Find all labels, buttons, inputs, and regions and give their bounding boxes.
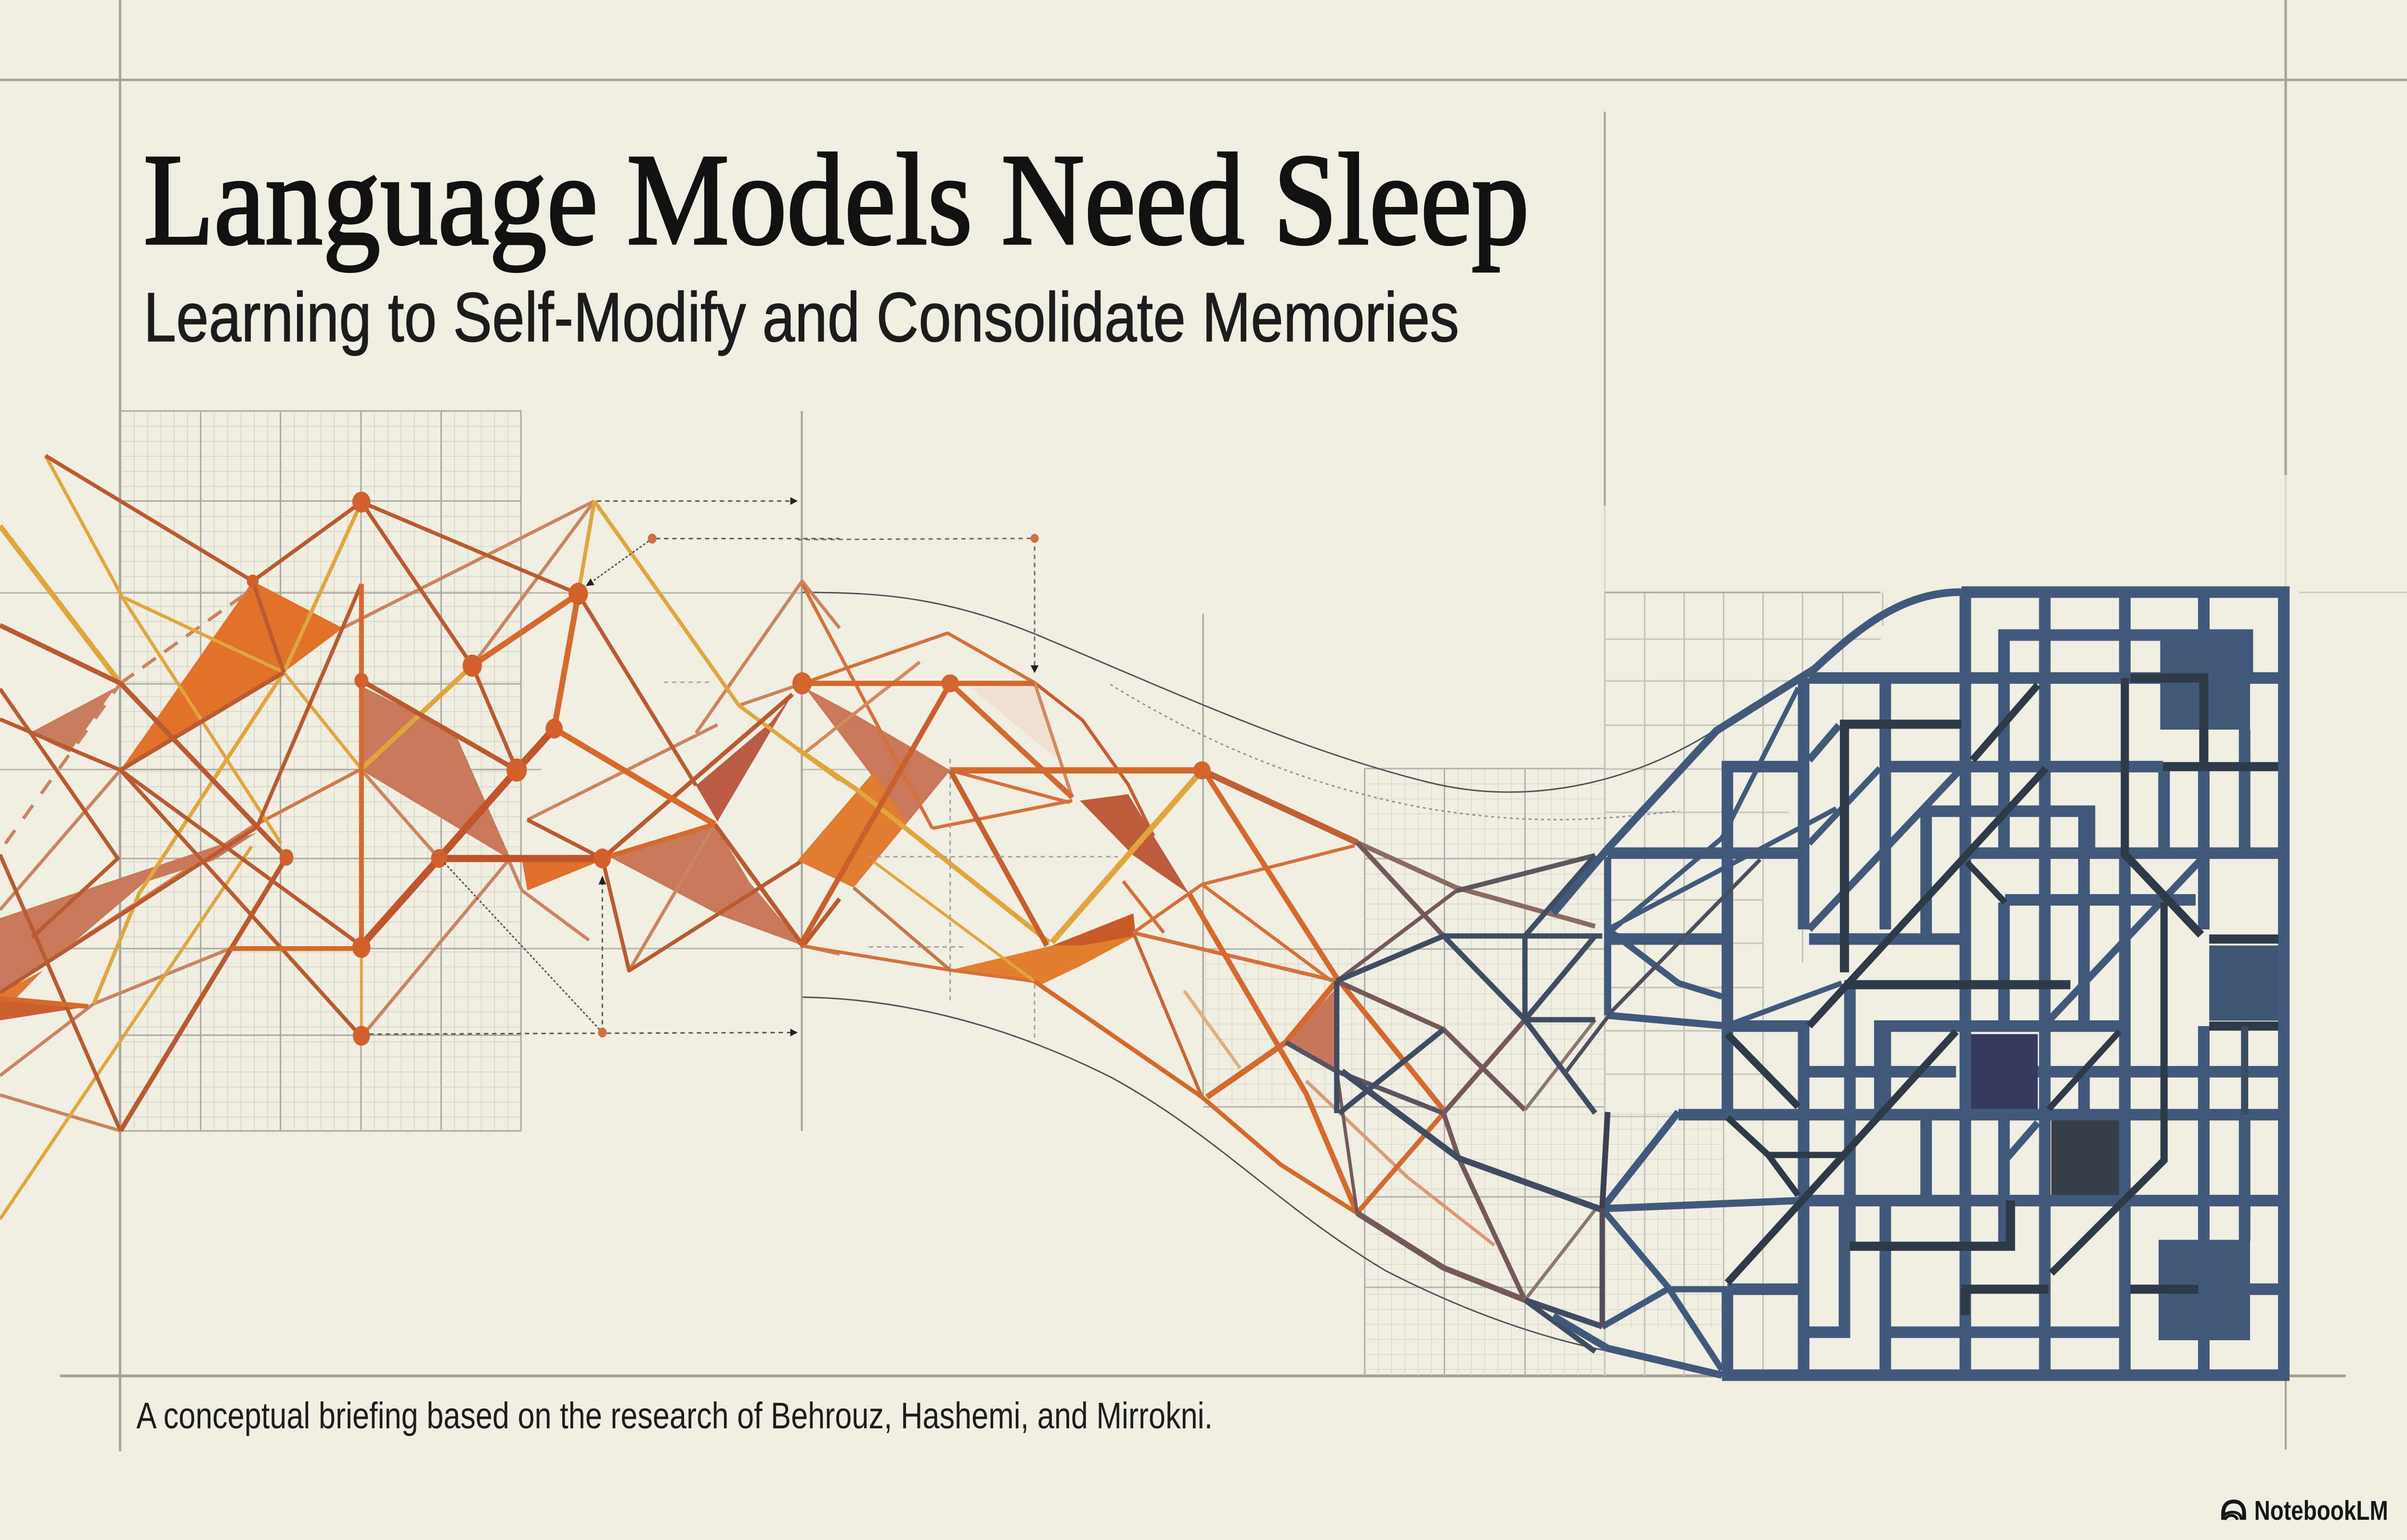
heavy rust links [362, 729, 602, 946]
flow envelope curves [802, 592, 1713, 1355]
subtitle: Learning to Self-Modify and Consolidate Memories [143, 278, 1459, 356]
icon: NotebookLM mark [2223, 1502, 2244, 1520]
navy links [1337, 855, 1602, 1351]
network: left orange section [0, 456, 840, 1219]
title: Language Models Need Sleep [143, 128, 1529, 272]
brown to navy links [1286, 843, 1595, 1300]
thick orange links [800, 683, 1444, 1213]
dashed annotation lines [798, 534, 1118, 1039]
middle graph paper [1203, 769, 1722, 1376]
filled memory blocks [1967, 634, 2284, 1340]
dark lattice lines [1564, 678, 2278, 1327]
NotebookLM wordmark: NotebookLM [2254, 1496, 2388, 1526]
network: middle transition section [793, 534, 1602, 1351]
attribution line: A conceptual briefing based on the research of Behrouz, Hashemi, and Mirrokni. [136, 1396, 1213, 1437]
thin orange links [800, 585, 1494, 1245]
tan thin links [0, 501, 840, 1131]
orange and terracotta facets [0, 581, 803, 1020]
right graph paper [1605, 592, 1883, 1376]
blue lattice lines [1553, 592, 2284, 1375]
bright orange links [0, 584, 715, 1007]
network nodes [247, 492, 812, 1046]
rust links [0, 456, 840, 1131]
amber links [0, 456, 840, 1219]
left graph paper [120, 411, 521, 1131]
nodes [793, 674, 1211, 779]
facets [798, 685, 1337, 1071]
dashed annotation arrows [369, 497, 840, 1038]
amber links [798, 749, 1202, 981]
network: crystallised blue lattice [1553, 592, 2284, 1375]
